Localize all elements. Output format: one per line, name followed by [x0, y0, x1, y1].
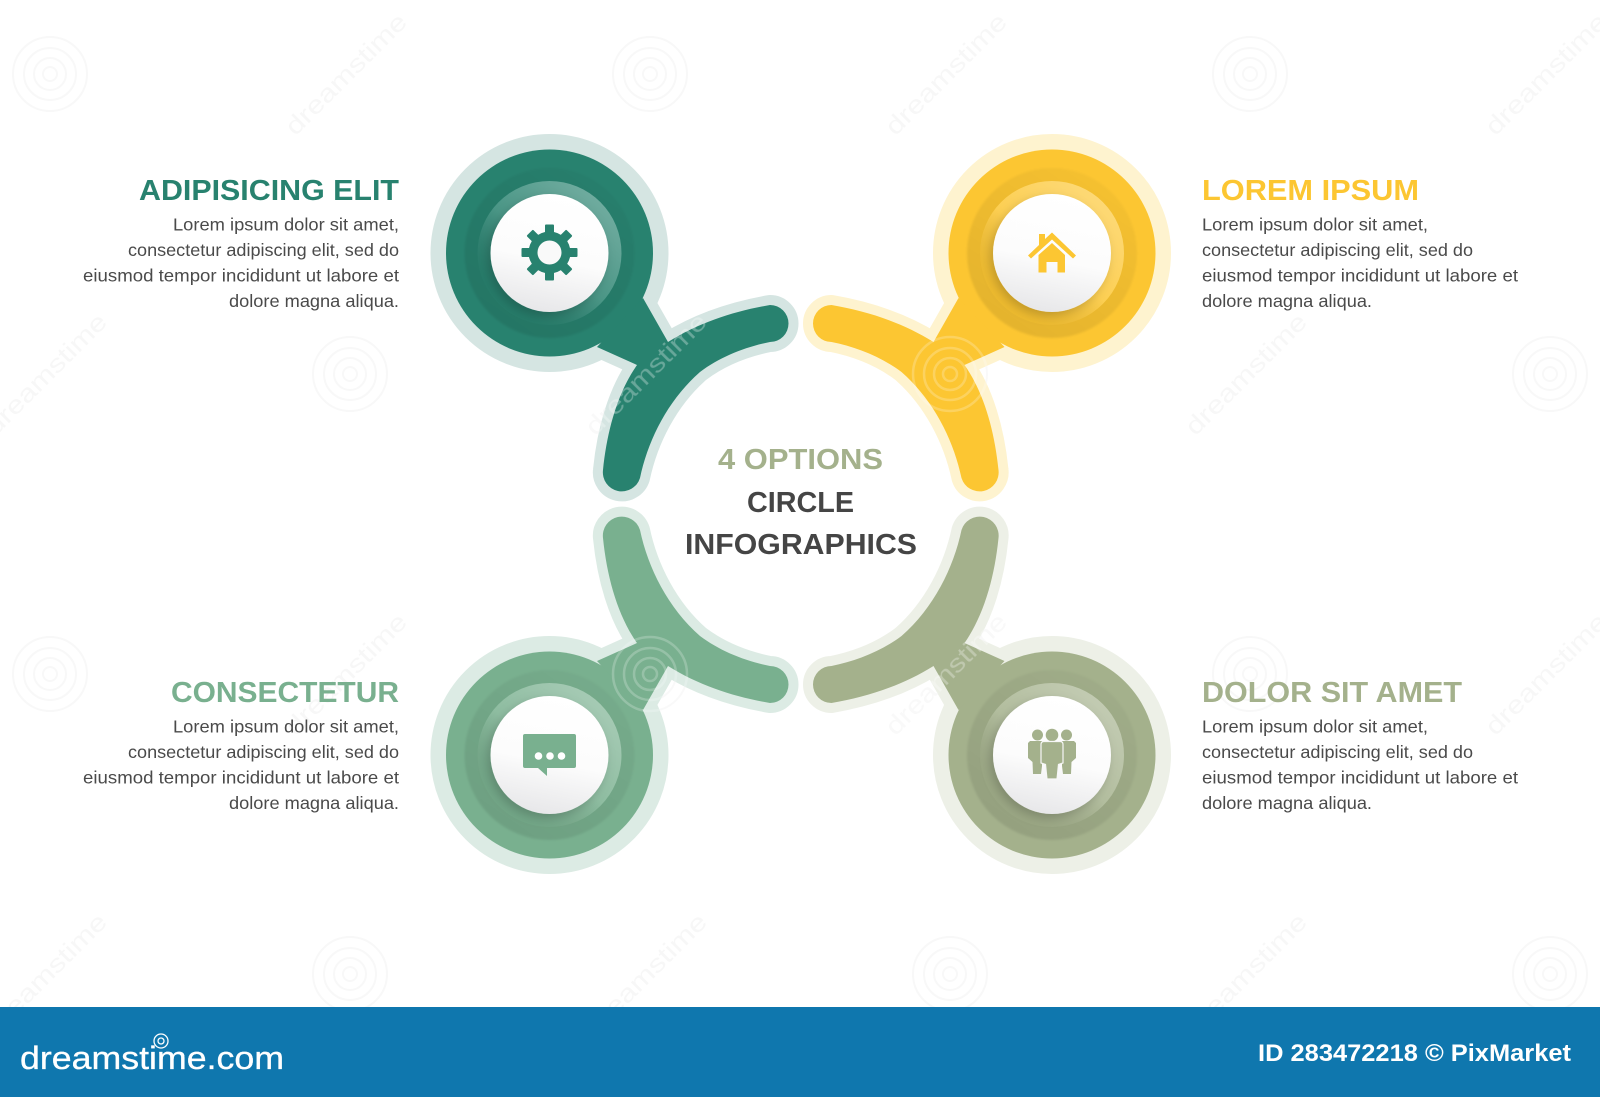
icon: speech bubble: [523, 734, 576, 776]
text block: Consectetur: Lorem ipsum dolor sit amet,: [173, 716, 399, 736]
panel: teal option shape: [440, 144, 789, 491]
panel: olive option shape: [813, 517, 1161, 864]
footer logo: dreamstime.com: [20, 1040, 284, 1076]
watermark text: dreamstime: [1480, 8, 1600, 141]
icon: gear: [522, 224, 578, 280]
text block: Consectetur: CONSECTETUR: [171, 677, 399, 709]
watermark text over shapes: dreamstime: [880, 608, 1013, 741]
yellow concentric rings: [967, 168, 1137, 338]
center title: INFOGRAPHICS: [685, 529, 917, 561]
mint concentric rings: [464, 670, 634, 840]
watermark text over shapes: [580, 308, 1013, 741]
watermark text: dreamstime: [280, 608, 413, 741]
text block: Lorem Ipsum: consectetur adipiscing elit, sed do: [1202, 240, 1473, 260]
text block: Dolor Sit Amet: consectetur adipiscing elit, sed do: [1202, 742, 1473, 762]
panel: yellow option shape: [813, 144, 1161, 491]
watermark over shapes: [613, 337, 987, 711]
watermark text: dreamstime: [1480, 608, 1600, 741]
text block: Adipisicing Elit: ADIPISICING ELIT: [139, 175, 400, 207]
text block: Consectetur: eiusmod tempor incididunt ut labore et: [83, 768, 399, 788]
watermark text: dreamstime: [880, 8, 1013, 141]
watermark text: dreamstime: [280, 8, 413, 141]
footer image credit: ID 283472218 © PixMarket: [1258, 1040, 1571, 1067]
center title: [685, 444, 917, 561]
text block: Dolor Sit Amet: Lorem ipsum dolor sit amet,: [1202, 716, 1428, 736]
text block: Lorem Ipsum: dolore magna aliqua.: [1202, 291, 1372, 311]
icon: house: [1028, 232, 1076, 272]
text block: Adipisicing Elit: consectetur adipiscing elit, sed do: [128, 240, 399, 260]
icon: people: [1028, 729, 1076, 779]
olive concentric rings: [967, 670, 1137, 840]
footer bar: [0, 1007, 1600, 1097]
watermark text: dreamstime: [1180, 908, 1313, 1041]
text block: Adipisicing Elit: Lorem ipsum dolor sit amet,: [173, 214, 399, 234]
center title: CIRCLE: [747, 487, 854, 519]
text block: Consectetur: consectetur adipiscing elit, sed do: [128, 742, 399, 762]
text block: Lorem Ipsum: eiusmod tempor incididunt ut labore et: [1202, 266, 1518, 286]
text block: Lorem Ipsum: [1202, 175, 1518, 311]
text block: Lorem Ipsum: LOREM IPSUM: [1202, 175, 1419, 207]
watermark text: dreamstime: [580, 908, 713, 1041]
text block: Dolor Sit Amet: [1202, 677, 1518, 813]
text block: Consectetur: [83, 677, 399, 813]
center title: 4 OPTIONS: [718, 444, 883, 476]
text block: Dolor Sit Amet: dolore magna aliqua.: [1202, 793, 1372, 813]
panel: mint option shape: [440, 517, 789, 864]
text block: Adipisicing Elit: eiusmod tempor incididunt ut labore et: [83, 266, 399, 286]
watermark text over shapes: dreamstime: [580, 308, 713, 441]
text block: Consectetur: dolore magna aliqua.: [229, 793, 399, 813]
text block: Dolor Sit Amet: eiusmod tempor incididunt ut labore et: [1202, 768, 1518, 788]
teal concentric rings: [464, 168, 634, 338]
text block: Lorem Ipsum: Lorem ipsum dolor sit amet,: [1202, 214, 1428, 234]
watermark text: dreamstime: [1180, 308, 1313, 441]
text block: Adipisicing Elit: [83, 175, 400, 311]
text block: Dolor Sit Amet: DOLOR SIT AMET: [1202, 677, 1463, 709]
text block: Adipisicing Elit: dolore magna aliqua.: [229, 291, 399, 311]
watermark text: dreamstime: [880, 608, 1013, 741]
watermark text: dreamstime: [580, 308, 713, 441]
